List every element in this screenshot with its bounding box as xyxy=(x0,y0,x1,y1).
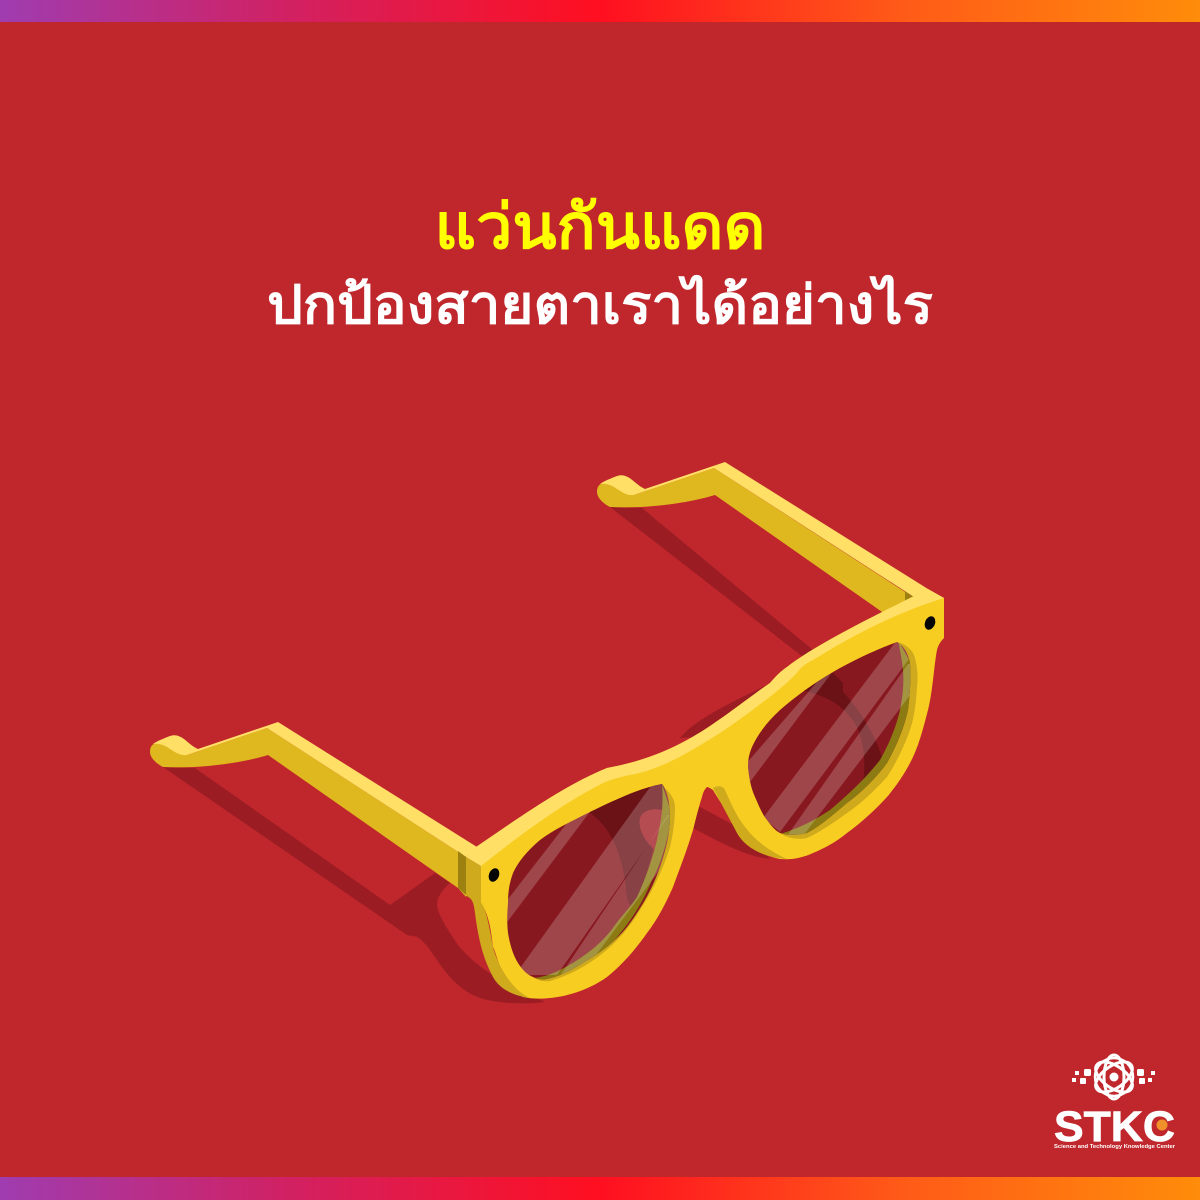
left temple arm xyxy=(150,722,477,897)
arm inner face xyxy=(597,468,913,637)
left rim depth xyxy=(533,784,675,981)
lens reflections xyxy=(745,640,914,836)
lens shadow area xyxy=(590,783,665,907)
logo orange dot xyxy=(1156,1120,1168,1130)
sunglasses illustration xyxy=(150,462,944,1003)
STKC logo xyxy=(1054,1055,1176,1151)
hinge strip xyxy=(458,851,466,895)
logo atom icon xyxy=(1072,1055,1155,1099)
hinge strip xyxy=(905,591,913,635)
arm top bevel xyxy=(600,462,928,599)
lens reflections xyxy=(505,783,680,979)
lens bright patch xyxy=(640,809,662,850)
right rim depth xyxy=(780,642,918,839)
arm inner face xyxy=(150,728,466,897)
front frame xyxy=(466,589,944,999)
arm top bevel xyxy=(153,722,477,857)
top gradient bar xyxy=(0,0,1200,22)
frame left side depth xyxy=(466,857,530,998)
lens inner rim xyxy=(780,640,912,836)
logo tagline: Science and Technology Knowledge Center xyxy=(1054,1144,1176,1150)
heading line 1: แว่นกันแดด xyxy=(434,193,766,262)
bottom gradient bar xyxy=(0,1177,1200,1200)
frame top bevel xyxy=(466,589,944,866)
lens inner rim xyxy=(533,784,672,982)
left hinge hole xyxy=(487,867,501,883)
frame bridge depth xyxy=(713,786,787,859)
logo wordmark: STKC xyxy=(1054,1103,1175,1151)
title xyxy=(267,193,934,335)
lens shadow area xyxy=(804,673,882,779)
heading line 2: ปกป้องสายตาเราได้อย่างไร xyxy=(267,274,934,335)
left lens xyxy=(507,784,670,980)
rear temple arm xyxy=(597,462,928,637)
shadow: glasses on ground xyxy=(163,507,885,1003)
right hinge hole xyxy=(923,615,937,631)
right lens xyxy=(748,642,910,835)
frame front face xyxy=(476,589,944,999)
